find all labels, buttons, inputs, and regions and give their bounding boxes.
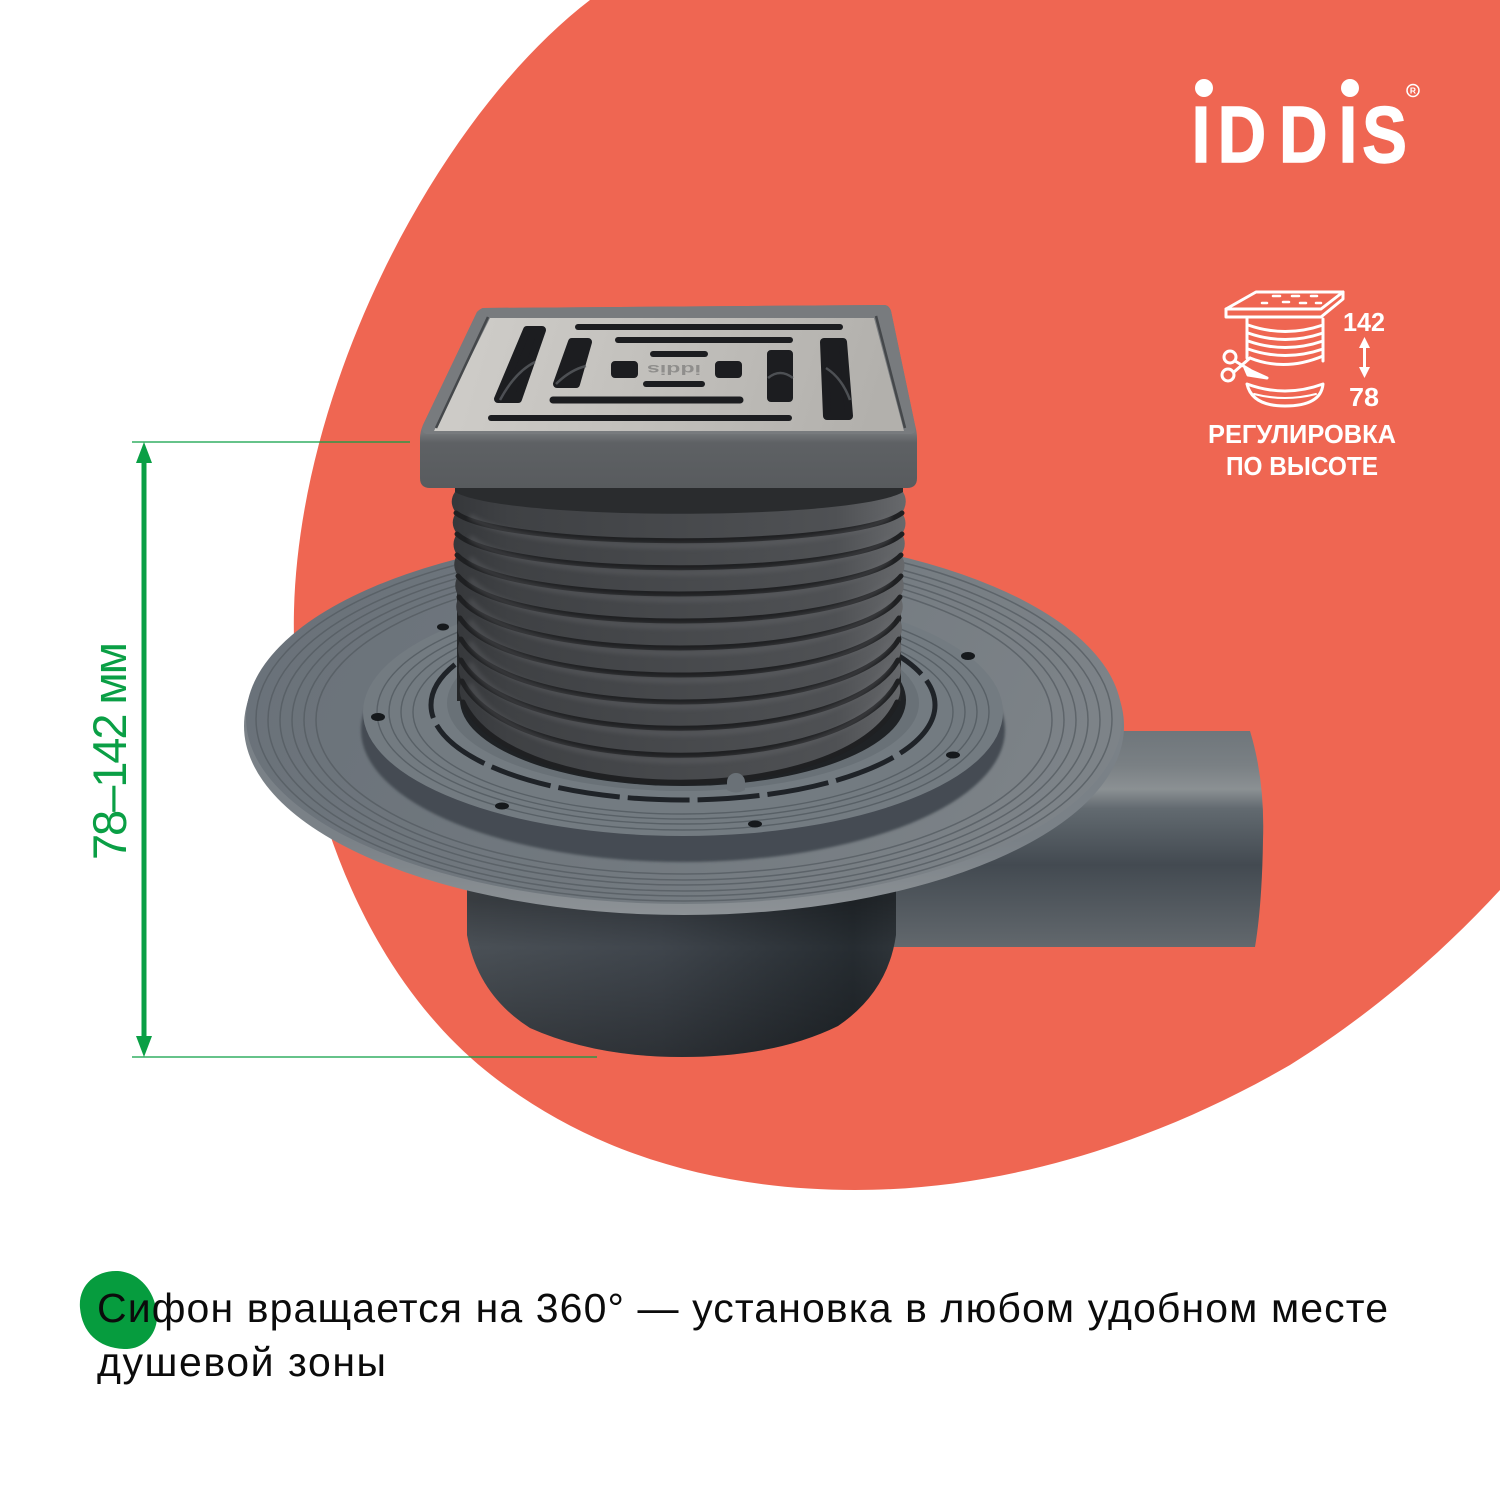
lid frame <box>420 305 917 488</box>
dimension: height 78–142 mm <box>83 442 597 1057</box>
label: dimension value: 78–142 мм <box>83 642 136 860</box>
flange top surface <box>246 532 1122 904</box>
logo: IDDIS: S <box>1362 89 1407 179</box>
rib bands, painted bottom to top <box>460 681 900 782</box>
caption: height adjustment: РЕГУЛИРОВКА <box>1208 421 1396 449</box>
lower cup <box>467 880 896 1057</box>
steel plate <box>434 318 904 431</box>
red blob background shape <box>294 0 1500 1190</box>
description text <box>97 1285 1388 1385</box>
description text: Сифон вращается на 360° — установка в любом удобном месте <box>97 1285 1388 1331</box>
value: 142: 142 <box>1343 307 1385 337</box>
side outlet pipe <box>880 731 1263 947</box>
flange lip <box>244 537 1124 915</box>
logo: IDDIS: R <box>1410 86 1416 96</box>
icon block: height adjustment: ПО ВЫСОТЕ <box>1226 453 1378 481</box>
flange ribs <box>256 537 1112 901</box>
green accent blob <box>80 1271 157 1349</box>
logo: IDDIS: D <box>1218 89 1266 179</box>
icon block: height adjustment <box>1208 292 1396 481</box>
logo: IDDIS <box>1192 79 1419 179</box>
raised ring grooves <box>377 594 989 830</box>
rib grooves <box>456 513 902 782</box>
drain slots ring <box>431 610 935 800</box>
value: 78: 78 <box>1349 382 1379 412</box>
description text: душевой зоны <box>97 1339 386 1385</box>
rib highlights <box>470 516 890 760</box>
inner collar <box>447 615 919 791</box>
arrow: up and down <box>1359 337 1370 378</box>
raised ring shadow <box>361 598 1005 862</box>
icon: drain with scissors <box>1222 292 1343 406</box>
grate lid <box>420 305 917 488</box>
product: shower drain <box>244 305 1263 1057</box>
grate slot reflections <box>500 362 850 400</box>
locating nub <box>727 773 745 792</box>
logo: IDDIS: I <box>1192 89 1210 179</box>
arrow: vertical dimension <box>136 442 152 1057</box>
raised ring <box>363 588 1003 836</box>
logo: IDDIS: I <box>1339 89 1357 179</box>
ribbed column <box>452 486 906 782</box>
grate brand mark: iddis <box>647 362 701 378</box>
screw holes <box>371 624 975 828</box>
logo: IDDIS: D <box>1279 89 1328 179</box>
grate slots <box>491 327 840 418</box>
